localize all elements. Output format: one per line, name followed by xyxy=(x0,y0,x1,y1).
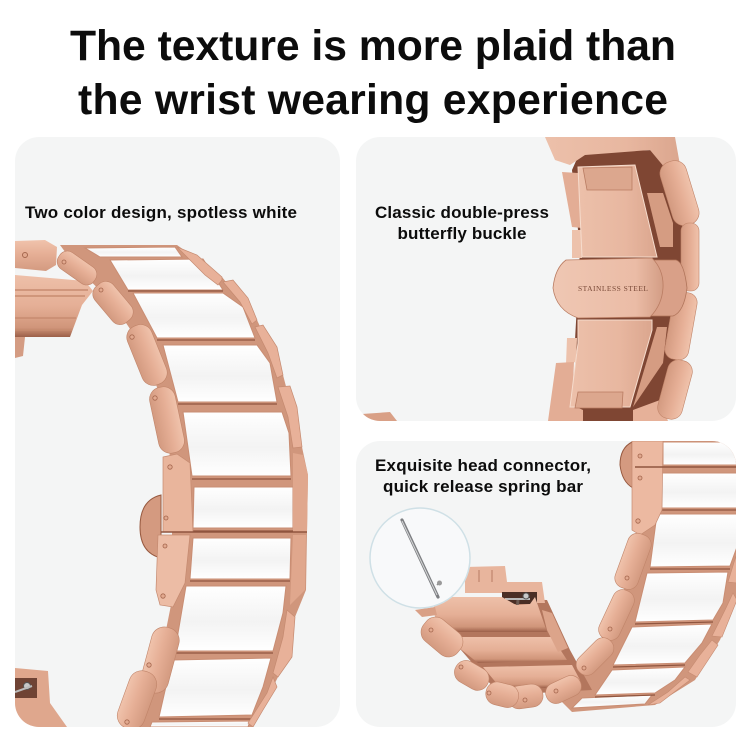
buckle side view xyxy=(140,453,308,607)
connector head and spring bar xyxy=(415,566,592,695)
link pins xyxy=(62,260,157,724)
buckle clasp xyxy=(553,258,687,318)
outer metal links xyxy=(177,247,302,727)
white ceramic links xyxy=(572,442,737,708)
inner metal links xyxy=(416,530,654,710)
heading: head connector: Exquisite head connector, xyxy=(375,456,591,475)
inner filler pieces xyxy=(633,193,673,407)
bottom buckle plate xyxy=(570,320,652,408)
heading: butterfly buckle: Classic double-press xyxy=(375,203,549,222)
panel: head connector xyxy=(356,441,740,727)
heading: butterfly buckle: butterfly buckle xyxy=(398,224,526,243)
link pins xyxy=(429,576,629,702)
panel: two color design xyxy=(15,137,340,733)
top buckle plate xyxy=(578,165,657,257)
heading: head connector xyxy=(375,456,591,496)
buckle side view xyxy=(620,441,737,535)
title xyxy=(70,22,676,124)
title: the wrist wearing experience xyxy=(78,76,668,124)
title: The texture is more plaid than xyxy=(70,22,676,70)
gap shadow lines xyxy=(595,510,737,697)
engraved label: STAINLESS STEEL xyxy=(578,284,648,293)
inset circle: spring bar xyxy=(370,508,470,608)
band backing xyxy=(560,441,740,712)
right outer links xyxy=(648,556,737,705)
inner metal links xyxy=(54,247,187,733)
gap shadow lines xyxy=(128,291,293,719)
left strap end xyxy=(15,240,93,358)
heading: butterfly buckle xyxy=(375,203,549,243)
heading: two color design: Two color design, spotless white xyxy=(25,203,297,222)
small bar fragment xyxy=(362,412,397,421)
top metal links xyxy=(545,137,680,421)
heading: head connector: quick release spring bar xyxy=(383,477,583,496)
right metal links xyxy=(657,160,700,420)
band backing xyxy=(60,245,308,727)
panel: butterfly buckle xyxy=(356,137,736,422)
white ceramic links xyxy=(85,247,293,727)
lower left strap end xyxy=(15,668,67,727)
dark band interior xyxy=(572,150,686,421)
